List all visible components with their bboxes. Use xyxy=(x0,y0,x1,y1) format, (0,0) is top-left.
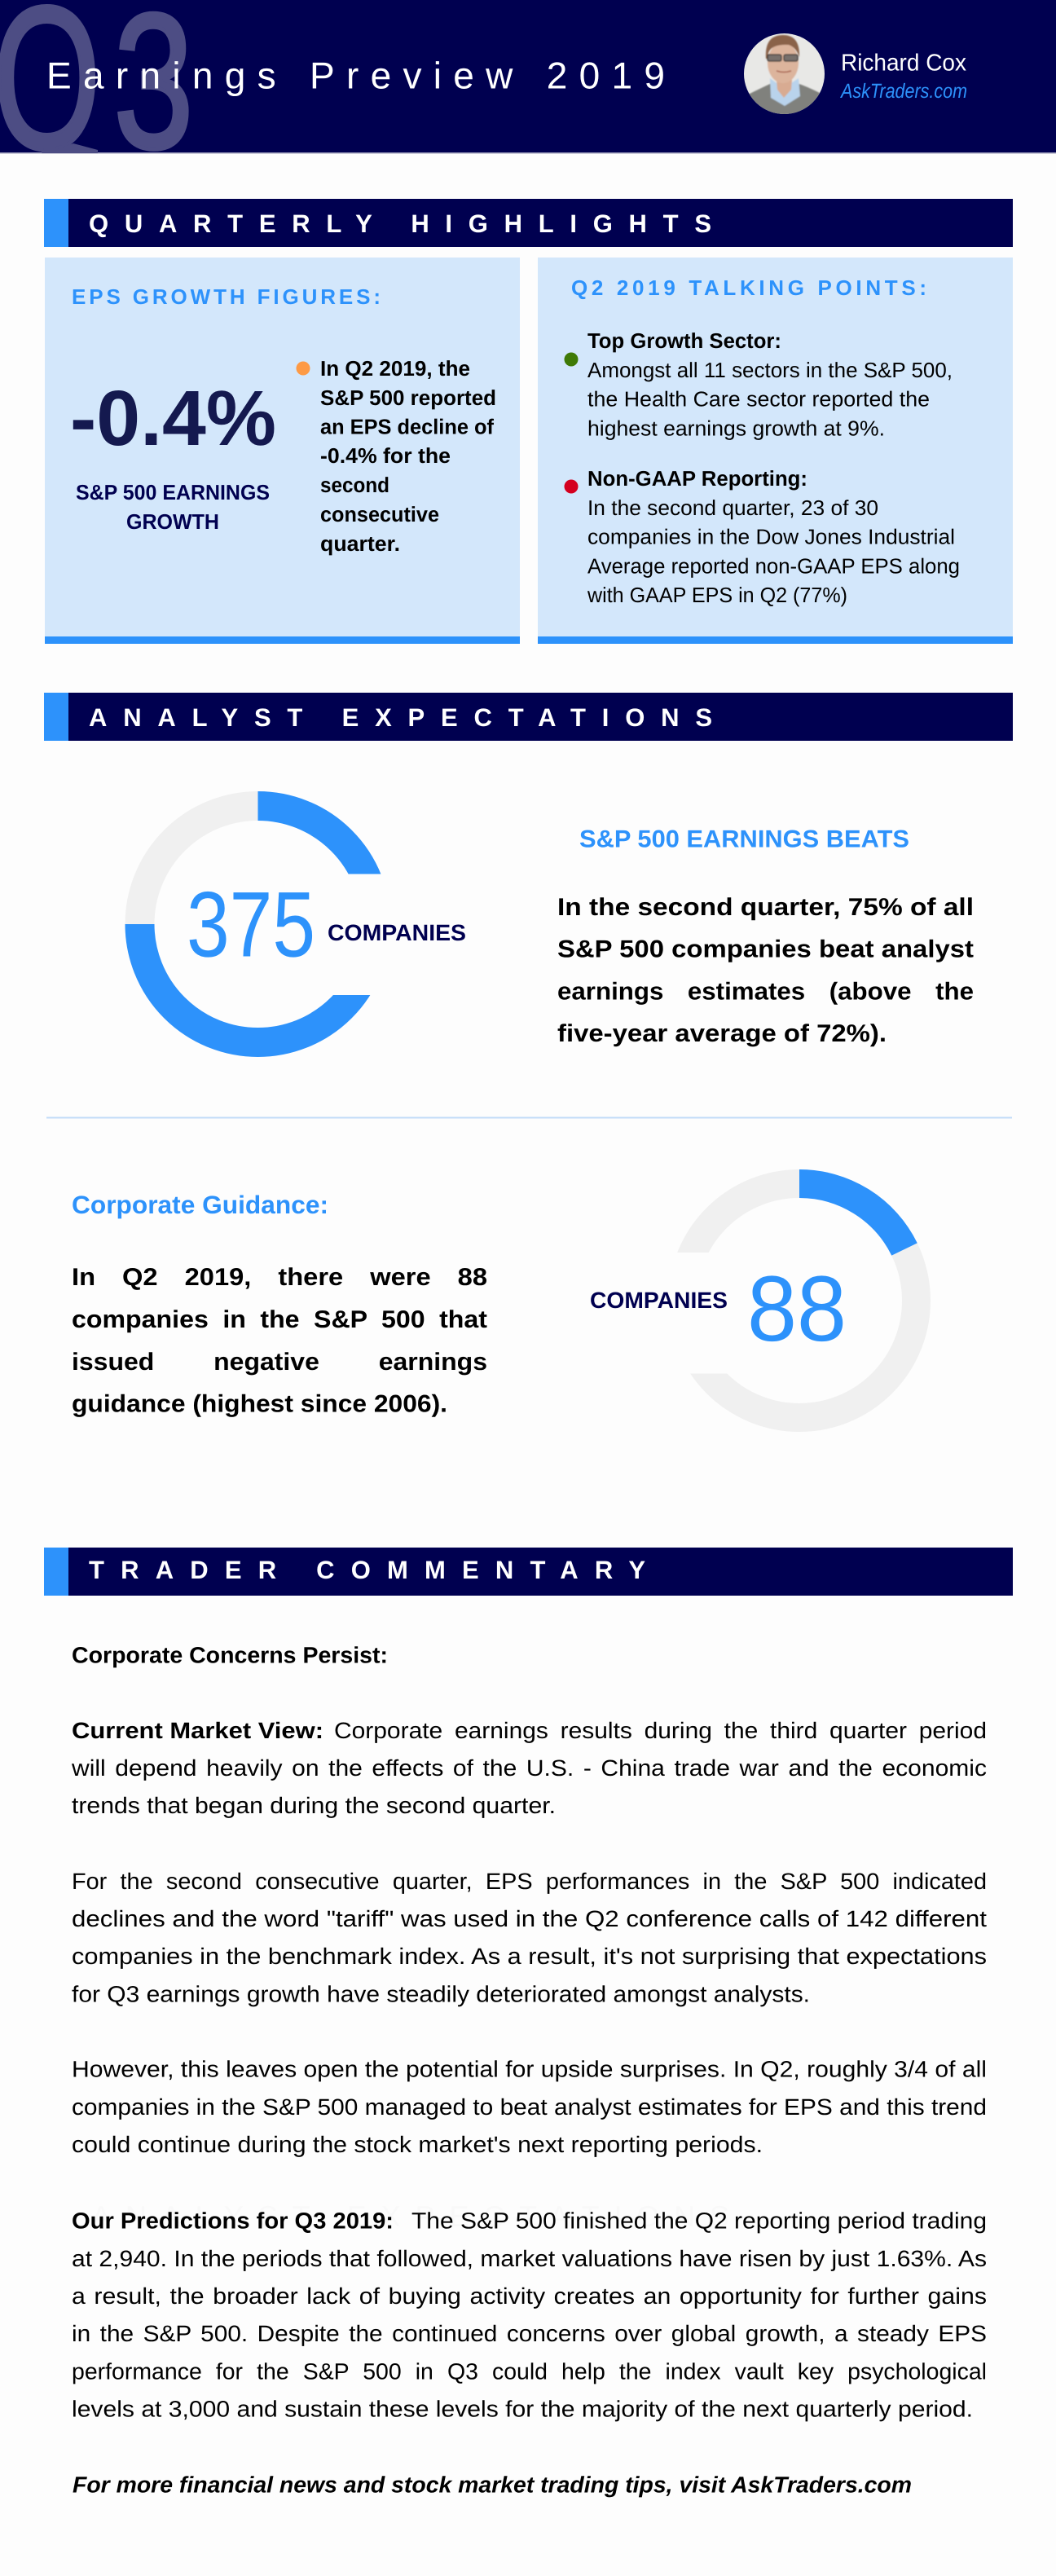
figure caption xyxy=(76,480,270,534)
paragraph: second consecutive quarter xyxy=(72,1869,987,2006)
paragraph: predictions for Q3 2019: Our Predictions for Q3 2019: xyxy=(72,2208,394,2233)
panel heading: Q2 2019 TALKING POINTS: xyxy=(571,275,926,300)
bullet text: an EPS decline of xyxy=(320,414,494,438)
author site: AskTraders.com xyxy=(839,80,967,103)
bullet text: -0.4% for the xyxy=(320,443,451,468)
icon: green bullet xyxy=(564,352,579,367)
donut value: 88 xyxy=(747,1257,847,1361)
text block: S&P 500 earnings beats: In the second quarter, 75% of all xyxy=(557,894,974,921)
section heading: quarterly highlights xyxy=(44,199,1013,247)
talking point: non-GAAP reporting: companies in the Dow Jones Industrial xyxy=(587,525,955,549)
donut label: COMPANIES xyxy=(590,1288,728,1313)
bullet text: In Q2 2019, the xyxy=(320,356,470,381)
figure caption: GROWTH xyxy=(126,509,219,534)
panel: Q2 2019 talking points xyxy=(538,258,1013,644)
talking point: top growth sector: highest earnings growth at 9%. xyxy=(587,416,885,440)
paragraph: current market view xyxy=(71,1718,987,1818)
paragraph: predictions for Q3 2019: in the S&P 500. Despite the continued concerns over global growth, a steady EPS xyxy=(72,2321,987,2346)
text block: S&P 500 earnings beats: five-year average of 72%). xyxy=(557,1020,887,1047)
large Q3 watermark xyxy=(0,4,189,153)
bullet text: second xyxy=(320,473,389,497)
paragraph: predictions for Q3 2019: performance for the S&P 500 in Q3 could help the index vault key psychological xyxy=(72,2358,987,2384)
subheading: Corporate Concerns Persist: xyxy=(72,1643,388,1667)
text block: S&P 500 earnings beats: S&P 500 companies beat analyst xyxy=(557,936,974,963)
talking point: top growth sector: the Health Care sector reported the xyxy=(587,386,930,411)
paragraph: predictions for Q3 2019: a result, the broader lack of buying activity creates an opportunity for further gains xyxy=(72,2283,987,2309)
section heading: quarterly highlights: QUARTERLY HIGHLIGHTS xyxy=(89,209,711,238)
donut chart: 375 companies xyxy=(140,806,466,1042)
talking point: top growth sector: Amongst all 11 sectors in the S&P 500, xyxy=(587,358,953,382)
icon: orange bullet xyxy=(297,362,310,375)
donut label: COMPANIES xyxy=(328,920,466,945)
bullet text xyxy=(320,356,496,556)
author name: Richard Cox xyxy=(841,51,966,77)
paragraph: predictions for Q3 2019: The S&P 500 finished the Q2 reporting period trading xyxy=(411,2208,987,2233)
talking point: non-GAAP reporting: In the second quarter, 23 of 30 xyxy=(587,495,878,520)
paragraph: upside surprises xyxy=(72,2057,987,2157)
paragraph: upside surprises: companies in the S&P 500 managed to beat analyst estimates for EPS and this trend xyxy=(72,2094,987,2120)
text block: S&P 500 earnings beats: S&P 500 EARNINGS BEATS xyxy=(579,826,909,852)
section heading: trader commentary xyxy=(44,1548,1013,1596)
text: ANALYST EXPECTATIONS xyxy=(91,2200,729,2233)
paragraph: current market view: will depend heavily on the effects of the U.S. - China trade war and the economic xyxy=(71,1755,987,1781)
panel heading: EPS GROWTH FIGURES: xyxy=(72,284,381,309)
paragraph: upside surprises: However, this leaves open the potential for upside surprises. In Q2, roughly 3/4 of all xyxy=(72,2057,987,2081)
text block: corporate guidance: issued negative earnings xyxy=(72,1349,487,1376)
bullet text: consecutive xyxy=(320,502,439,526)
text block: trader commentary xyxy=(71,1643,987,2497)
icon: red bullet xyxy=(564,479,579,494)
figure caption: S&P 500 EARNINGS xyxy=(76,480,270,504)
header banner xyxy=(0,0,1056,153)
paragraph: predictions for Q3 2019: levels at 3,000 and sustain these levels for the majority of the next quarterly period. xyxy=(72,2396,973,2422)
bullet text: S&P 500 reported xyxy=(320,385,496,410)
paragraph: upside surprises: could continue during the stock market's next reporting periods. xyxy=(72,2132,763,2157)
talking point: non-GAAP reporting xyxy=(587,466,960,607)
text block: corporate guidance: guidance (highest since 2006). xyxy=(72,1390,447,1418)
text block: corporate guidance: In Q2 2019, there were 88 xyxy=(72,1264,487,1291)
paragraph: second consecutive quarter: for Q3 earnings growth have steadily deteriorated amongst analysts. xyxy=(72,1982,810,2006)
donut chart: 88 companies xyxy=(590,1183,916,1418)
author portrait xyxy=(744,33,825,114)
bullet text: quarter. xyxy=(320,531,400,556)
section heading: analyst expectations xyxy=(44,693,1013,741)
paragraph: current market view: Current Market View: xyxy=(72,1718,323,1743)
talking point: non-GAAP reporting: Non-GAAP Reporting: xyxy=(587,466,807,491)
text block: S&P 500 earnings beats: earnings estimates (above the xyxy=(557,978,974,1006)
paragraph: second consecutive quarter: companies in the benchmark index. As a result, it's not surprising that expectations xyxy=(72,1944,987,1969)
paragraph: predictions for Q3 2019 xyxy=(72,2208,987,2422)
text block: corporate guidance: Corporate Guidance: xyxy=(72,1191,328,1219)
title: Earnings Preview 2019 xyxy=(46,54,665,96)
paragraph: second consecutive quarter: declines and the word "tariff" was used in the Q2 conference calls of 142 different xyxy=(72,1906,987,1931)
text block: S&P 500 earnings beats xyxy=(557,826,974,1047)
donut value: 375 xyxy=(187,874,315,976)
section heading: trader commentary: TRADER COMMENTARY xyxy=(89,1556,645,1584)
paragraph: current market view: Corporate earnings results during the third quarter period xyxy=(334,1718,987,1743)
paragraph: predictions for Q3 2019: at 2,940. In the periods that followed, market valuations have risen by just 1.63%. As xyxy=(72,2246,987,2271)
talking point: top growth sector: Top Growth Sector: xyxy=(587,328,781,353)
text block: corporate guidance xyxy=(72,1191,487,1418)
big figure: -0.4% xyxy=(70,375,276,462)
talking point: non-GAAP reporting: Average reported non-GAAP EPS along xyxy=(587,554,960,579)
panel: EPS growth figures xyxy=(45,258,520,644)
paragraph: second consecutive quarter: For the second consecutive quarter, EPS performances in the S&P 500 indicated xyxy=(72,1869,987,1894)
text block: corporate guidance: companies in the S&P 500 that xyxy=(72,1306,487,1333)
talking point: non-GAAP reporting: with GAAP EPS in Q2 (77%) xyxy=(587,583,847,607)
paragraph: current market view: trends that began during the second quarter. xyxy=(72,1793,556,1818)
closing call to action: For more financial news and stock market trading tips, visit AskTraders.com xyxy=(73,2473,912,2497)
section heading: analyst expectations: ANALYST EXPECTATIONS xyxy=(89,703,712,732)
talking point: top growth sector xyxy=(587,328,953,440)
